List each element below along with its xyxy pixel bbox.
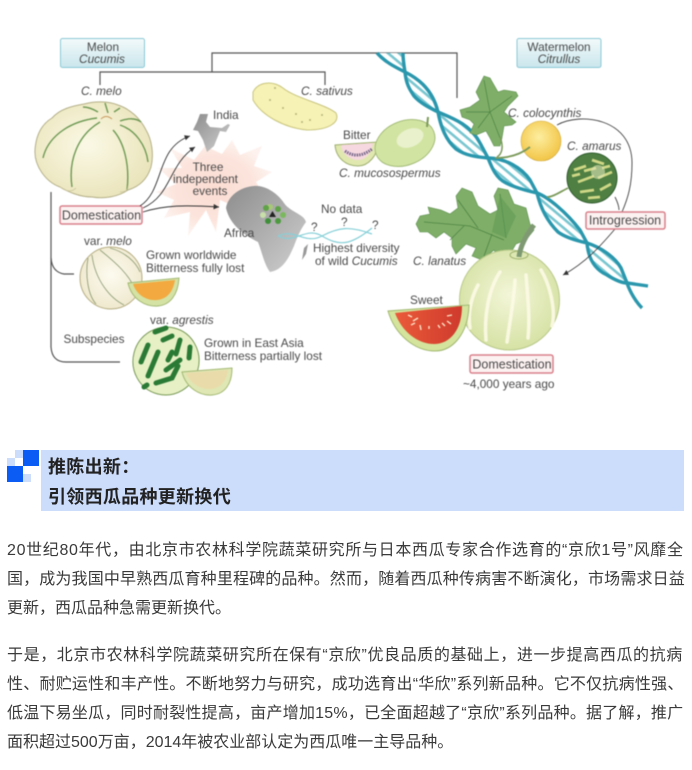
label: C. lanatus: C. lanatus — [413, 254, 466, 268]
icon: red watermelon slice — [388, 305, 469, 351]
icon: C. mucosospermus bitter fruit: Bitter — [343, 128, 371, 142]
label: no data with question marks and small DNA: ? — [372, 218, 379, 232]
icon: colocynthis leaf — [460, 76, 518, 157]
icon: var. agrestis fruit — [125, 320, 232, 402]
box: Watermelon Citrullus: Citrullus — [538, 52, 580, 66]
box: Domestication right: Domestication — [472, 358, 552, 372]
paragraph 2: 低温下易坐瓜，同时耐裂性提高，亩产增加15%，已全面超越了“京欣”系列品种。据了解，推广 — [7, 705, 683, 722]
heading banner — [41, 450, 684, 511]
label: no data with question marks and small DNA: ? — [311, 220, 318, 234]
map: India: India — [213, 108, 239, 122]
burst: three independent events: Three — [193, 160, 224, 174]
text: grown in East Asia: Grown in East Asia — [204, 336, 304, 350]
icon: C. amarus striped fruit — [547, 139, 622, 203]
label: Sweet: Sweet — [410, 293, 444, 307]
map: Africa — [224, 186, 308, 272]
heading line 1: 推陈出新： — [48, 457, 140, 477]
map: India — [193, 108, 239, 152]
paragraph 2: 面积超过500万亩，2014年被农业部认定为西瓜唯一主导品种。 — [7, 734, 453, 751]
icon: C. sativus cucumber: C. sativus — [301, 84, 353, 98]
text: highest diversity: Highest diversity — [313, 241, 400, 255]
icon: large melon C. melo — [35, 102, 152, 198]
text: grown in East Asia — [204, 336, 323, 363]
illustration: melon and watermelon evolution — [34, 37, 666, 396]
paragraph 1: 国，成为我国中早熟西瓜育种里程碑的品种。然而，随着西瓜种传病害不断演化，市场需求日益 — [7, 571, 685, 588]
map: Africa: Africa — [224, 226, 255, 240]
label: 4,000 years ago: ~4,000 years ago — [463, 377, 555, 391]
arrows from Domestication to India and Africa — [140, 136, 219, 212]
label: Subspecies: Subspecies — [64, 332, 125, 346]
icon: var. melo fruit: var. melo — [84, 234, 132, 248]
icon: var. melo fruit — [80, 234, 179, 309]
text: highest diversity: of wild Cucumis — [315, 254, 398, 268]
text: grown worldwide: Bitterness fully lost — [146, 261, 245, 275]
burst: three independent events: independent — [173, 172, 239, 186]
label: no data with question marks and small DNA — [278, 202, 379, 243]
icon: C. lanatus leaf — [416, 188, 534, 260]
label: no data with question marks and small DNA: No data — [321, 202, 363, 216]
paragraph 2: 性、耐贮运性和丰产性。不断地努力与研究，成功选育出“华欣”系列新品种。它不仅抗病性强、 — [7, 676, 684, 693]
paragraph 1: 20世纪80年代，由北京市农林科学院蔬菜研究所与日本西瓜专家合作选育的“京欣1号”风靡全 — [7, 542, 684, 559]
paragraph 2: 于是，北京市农林科学院蔬菜研究所在保有“京欣”优良品质的基础上，进一步提高西瓜的抗病 — [7, 647, 683, 664]
paragraph 2 — [7, 646, 684, 751]
icon: C. colocynthis yellow fruit: C. colocynthis — [508, 106, 582, 120]
DNA double helix — [377, 53, 648, 308]
burst: three independent events: events — [193, 184, 227, 198]
introgression arcs and arrow — [557, 119, 632, 275]
heading icon: blue squares — [7, 450, 39, 482]
box: Melon Cucumis: Melon — [87, 40, 119, 54]
icon: C. sativus cucumber — [253, 83, 353, 130]
box: Introgression: Introgression — [589, 214, 661, 228]
heading line 2: 引领西瓜品种更新换代 — [48, 487, 231, 507]
box: Domestication left: Domestication — [62, 208, 141, 222]
text: grown worldwide: Grown worldwide — [146, 248, 237, 262]
burst: three independent events — [156, 140, 272, 236]
box: Watermelon Citrullus — [517, 38, 601, 68]
box: Watermelon Citrullus: Watermelon — [527, 40, 591, 54]
box: Melon Cucumis: Cucumis — [79, 52, 125, 66]
label: var. agrestis: var. agrestis — [150, 313, 214, 327]
icon: C. amarus striped fruit: C. amarus — [567, 139, 622, 153]
icon: C. mucosospermus bitter fruit: C. mucosospermus — [339, 166, 441, 180]
tree connector lines — [51, 53, 457, 362]
icon: C. mucosospermus bitter fruit — [335, 111, 442, 180]
paragraph 1 — [7, 541, 685, 617]
text: grown worldwide — [146, 248, 245, 275]
icon: domesticated watermelon — [460, 225, 560, 350]
label: C. melo: C. melo — [81, 84, 122, 98]
text: highest diversity — [313, 241, 400, 268]
label: no data with question marks and small DNA: ? — [341, 215, 348, 229]
paragraph 1: 更新，西瓜品种急需更新换代。 — [7, 600, 231, 617]
box: Melon Cucumis — [60, 38, 144, 68]
icon: C. colocynthis yellow fruit — [495, 106, 582, 161]
text: grown in East Asia: Bitterness partially lost — [204, 349, 323, 363]
